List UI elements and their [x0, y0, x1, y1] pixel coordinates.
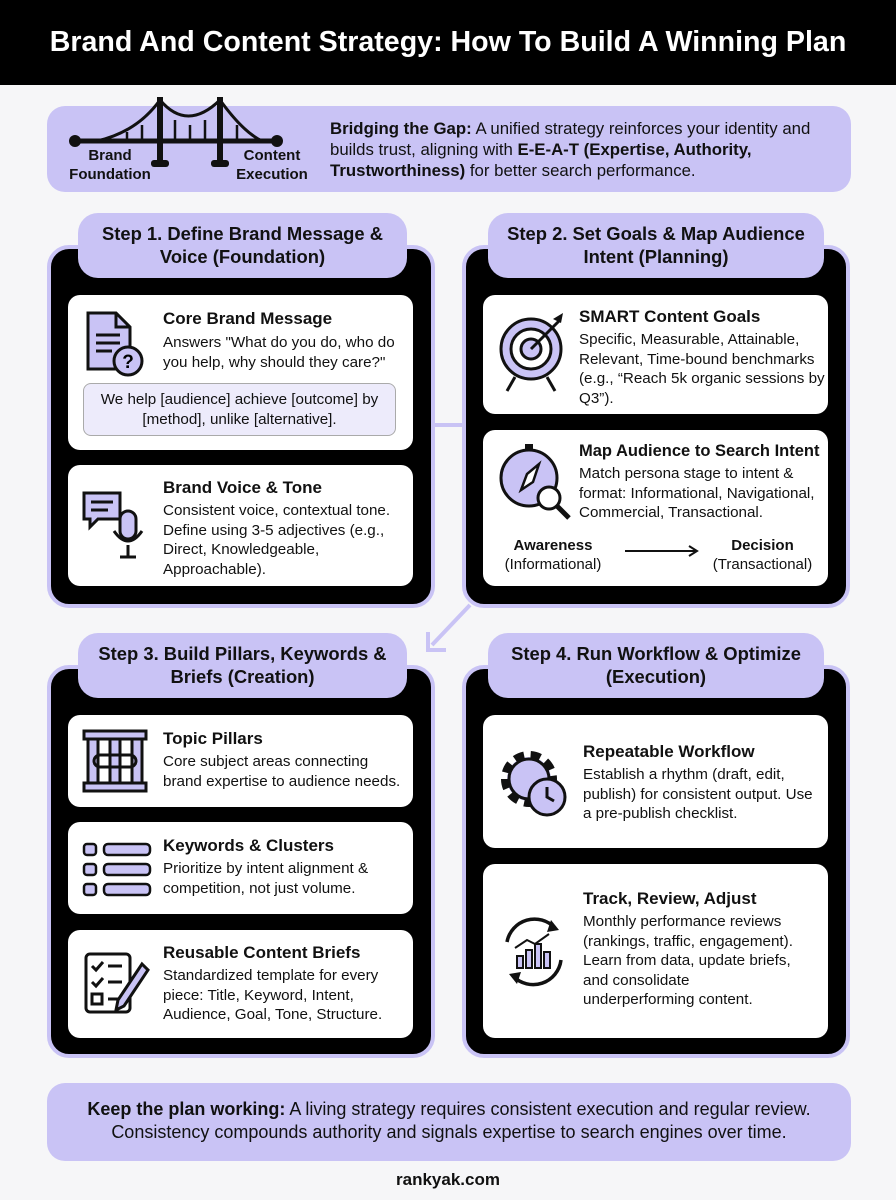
- card: workflow: Establish a rhythm (draft, edit, publish) for consistent output. Use a pre-publish checklist.: [583, 766, 813, 822]
- step 3 heading: Step 3. Build Pillars, Keywords &: [98, 643, 387, 664]
- card: smart goals: SMART Content Goals: [579, 307, 760, 326]
- step 4 heading: [488, 633, 824, 698]
- card: audience intent: Map Audience to Search Intent: [579, 442, 820, 460]
- step 1 heading: Step 1. Define Brand Message &: [102, 223, 383, 244]
- bridge labels: Brand: [88, 147, 132, 164]
- card: workflow: [483, 715, 828, 848]
- card: smart goals: Specific, Measurable, Attainable, Relevant, Time-bound benchmarks (e.g., “Reach 5k organic sessions by Q3”).: [579, 331, 825, 406]
- card: topic pillars: Core subject areas connecting brand expertise to audience needs.: [163, 753, 400, 790]
- step 3 heading: Briefs (Creation): [170, 666, 315, 687]
- card: audience intent: [483, 430, 828, 586]
- card: keywords: [68, 822, 413, 914]
- title: [0, 0, 896, 85]
- intro banner: Execution: [236, 166, 308, 183]
- step 4 heading: Step 4. Run Workflow & Optimize: [511, 643, 801, 664]
- icon: bridge: [69, 97, 283, 167]
- card: topic pillars: [68, 715, 413, 807]
- step 2 heading: Intent (Planning): [583, 246, 729, 267]
- step 2 heading: Step 2. Set Goals & Map Audience: [507, 223, 805, 244]
- card: brand voice: Brand Voice & Tone: [163, 478, 322, 497]
- title: Brand And Content Strategy: How To Build A Winning Plan: [50, 26, 846, 58]
- card: topic pillars: Topic Pillars: [163, 729, 263, 748]
- icon: checklist pencil: [84, 952, 150, 1014]
- step 2 heading: [488, 213, 824, 278]
- awareness to decision arrow: Awareness: [514, 537, 592, 554]
- icon: cycle chart: [505, 917, 563, 986]
- step 3 heading: [78, 633, 407, 698]
- icon: gear clock: [501, 751, 566, 816]
- footer banner: Consistency compounds authority and signals expertise to search engines over time.: [111, 1122, 787, 1142]
- card: workflow: Repeatable Workflow: [583, 742, 755, 761]
- card: content briefs: Reusable Content Briefs: [163, 943, 360, 962]
- icon: document question: ?: [122, 352, 134, 373]
- awareness to decision arrow: Decision: [731, 537, 794, 554]
- footer url: rankyak.com: [396, 1170, 500, 1189]
- card: brand voice: Consistent voice, contextual tone. Define using 3-5 adjectives (e.g., Direct, Knowledgeable, Approachable).: [163, 502, 390, 578]
- bridge labels: [69, 147, 151, 183]
- icon: chat mic: [82, 492, 144, 558]
- card: content briefs: [68, 930, 413, 1038]
- card: keywords: Prioritize by intent alignment & competition, not just volume.: [163, 860, 368, 896]
- card: core brand message: Core Brand Message: [163, 309, 332, 328]
- icon: list: [82, 842, 152, 896]
- panel: step 1: [47, 213, 435, 608]
- card: keywords: Keywords & Clusters: [163, 836, 334, 855]
- template box: We help [audience] achieve [outcome] by [method], unlike [alternative].: [101, 391, 378, 428]
- icon: pillars: [82, 730, 148, 792]
- intro banner: Content: [244, 147, 300, 164]
- panel: step 3: [47, 633, 435, 1058]
- card: content briefs: Standardized template for every piece: Title, Keyword, Intent, Audience, Goal, Tone, Structure.: [163, 967, 382, 1023]
- icon: document question: [86, 312, 144, 376]
- card: core brand message: [68, 295, 413, 450]
- step 4 heading: (Execution): [606, 666, 706, 687]
- card: track review adjust: Track, Review, Adjust: [583, 889, 757, 908]
- step 1 heading: Voice (Foundation): [160, 246, 325, 267]
- card: smart goals: [483, 295, 828, 414]
- bridge labels: Foundation: [69, 166, 151, 183]
- intro text: Bridging the Gap: A unified strategy reinforces your identity and builds trust, aligning with E-E-A-T (Expertise, Authority, Trustworthiness) for better search performance.: [330, 119, 810, 180]
- awareness to decision arrow: [505, 537, 812, 573]
- card: brand voice: [68, 465, 413, 586]
- panel: step 4: [462, 633, 850, 1058]
- step 1 heading: [78, 213, 407, 278]
- icon: compass magnifier: [500, 444, 571, 520]
- awareness to decision arrow: (Informational): [505, 556, 601, 573]
- panel: step 2: [462, 213, 850, 608]
- card: audience intent: Match persona stage to intent & format: Informational, Navigational, Commercial, Transactional.: [579, 465, 815, 521]
- footer banner: Keep the plan working: A living strategy requires consistent execution and regular review.: [87, 1099, 811, 1119]
- icon: target: [500, 313, 563, 392]
- card: track review adjust: Monthly performance reviews (rankings, traffic, engagement). Learn from data, update briefs, and consolidate underperforming content.: [583, 913, 793, 1008]
- connectors: [426, 423, 472, 652]
- intro banner: [47, 106, 851, 192]
- card: core brand message: Answers "What do you do, who do you help, why should they care?": [163, 334, 395, 370]
- card: track review adjust: [483, 864, 828, 1038]
- footer banner: [47, 1083, 851, 1161]
- awareness to decision arrow: (Transactional): [713, 556, 812, 573]
- template box: [83, 383, 396, 436]
